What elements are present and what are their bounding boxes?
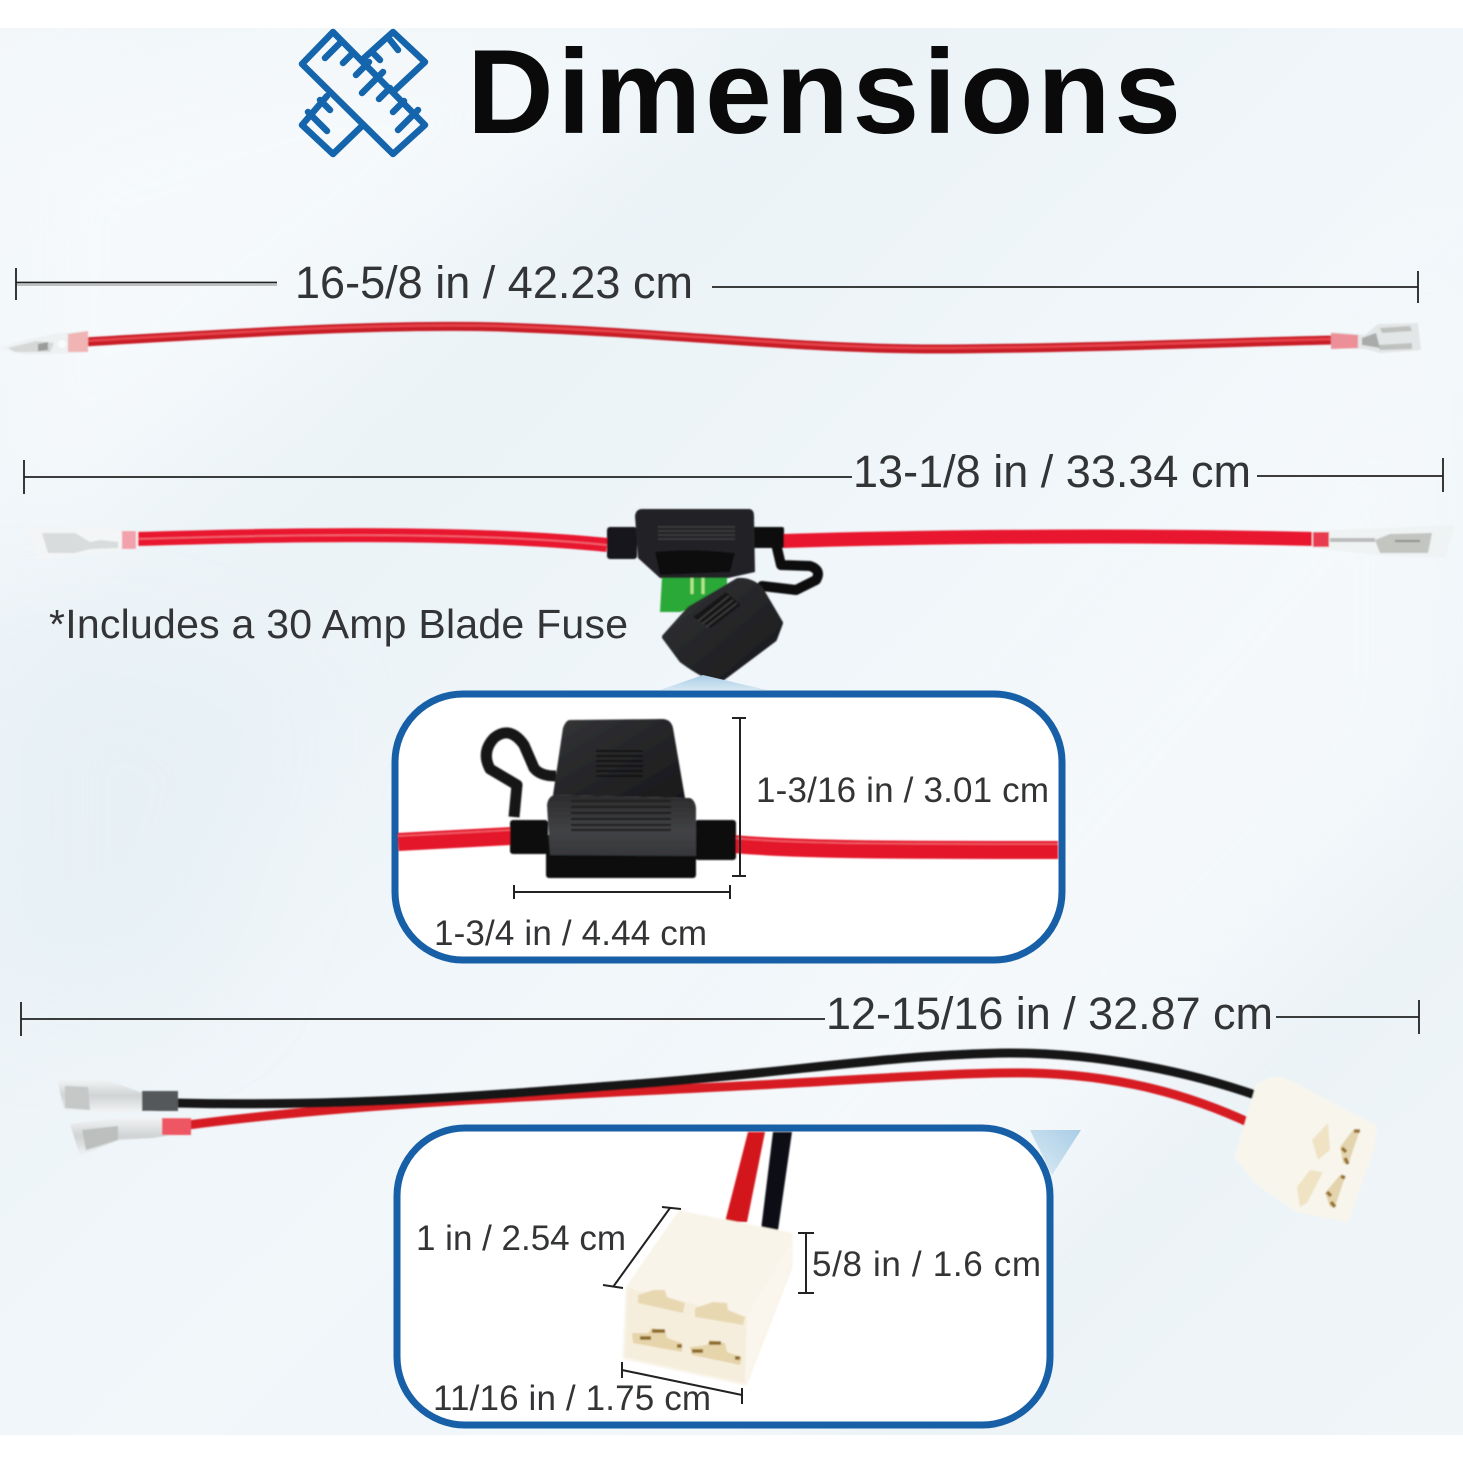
dimension: wire 2 length bbox=[24, 446, 1443, 497]
wire 1 bbox=[0, 323, 1421, 355]
dimension: wire 1 length: 16-5/8 in / 42.23 cm bbox=[295, 257, 693, 308]
dimension: connector depth bbox=[603, 1207, 681, 1288]
wire 2 bbox=[24, 509, 1455, 679]
connector body bbox=[625, 1213, 790, 1383]
note: blade fuse: *Includes a 30 Amp Blade Fuse bbox=[49, 601, 628, 647]
panel: fuse holder detail: 1-3/16 in / 3.01 cm bbox=[756, 771, 1049, 810]
right terminal bbox=[1312, 525, 1455, 558]
left terminal bbox=[24, 527, 138, 560]
leads bbox=[725, 1132, 765, 1222]
left terminal bbox=[0, 331, 88, 355]
panel: connector detail: 11/16 in / 1.75 cm bbox=[433, 1379, 711, 1418]
red wires bbox=[398, 836, 512, 842]
blade fuse bbox=[660, 577, 727, 612]
wire 3: twin leads bbox=[58, 1053, 1375, 1220]
dimension: wire 1 length bbox=[16, 257, 1418, 308]
panel: fuse holder detail bbox=[395, 694, 1062, 960]
dimension: wire 3 length bbox=[21, 988, 1419, 1039]
connector right bbox=[1237, 1079, 1375, 1220]
dimension: wire 3 length: 12-15/16 in / 32.87 cm bbox=[826, 988, 1273, 1039]
cap bbox=[665, 581, 780, 679]
dimension: connector height bbox=[798, 1233, 814, 1293]
dimension: holder width bbox=[514, 885, 730, 899]
dimension: wire 2 length: 13-1/8 in / 33.34 cm bbox=[853, 446, 1251, 497]
terminals left bbox=[58, 1079, 191, 1156]
panel: connector detail bbox=[397, 1128, 1050, 1425]
strap loop bbox=[486, 733, 556, 817]
panel: connector detail: 1 in / 2.54 cm bbox=[416, 1219, 626, 1258]
cap bbox=[553, 719, 685, 798]
panel: connector detail: 5/8 in / 1.6 cm bbox=[812, 1245, 1041, 1284]
dimension: holder height bbox=[732, 718, 746, 876]
holder stubs bbox=[510, 820, 548, 854]
icon: crossed rulers bbox=[302, 32, 425, 154]
dimension: connector width bbox=[622, 1362, 742, 1404]
slots bbox=[638, 1290, 685, 1313]
inline fuse holder bbox=[607, 509, 818, 679]
panel: fuse holder detail: 1-3/4 in / 4.44 cm bbox=[434, 914, 707, 953]
title: Dimensions bbox=[467, 25, 1181, 159]
holder body bbox=[546, 835, 696, 878]
strap bbox=[762, 548, 818, 590]
right terminal bbox=[1331, 323, 1421, 353]
callout pointer: connector bbox=[1030, 1130, 1081, 1175]
callout pointer: fuse bbox=[660, 675, 767, 690]
